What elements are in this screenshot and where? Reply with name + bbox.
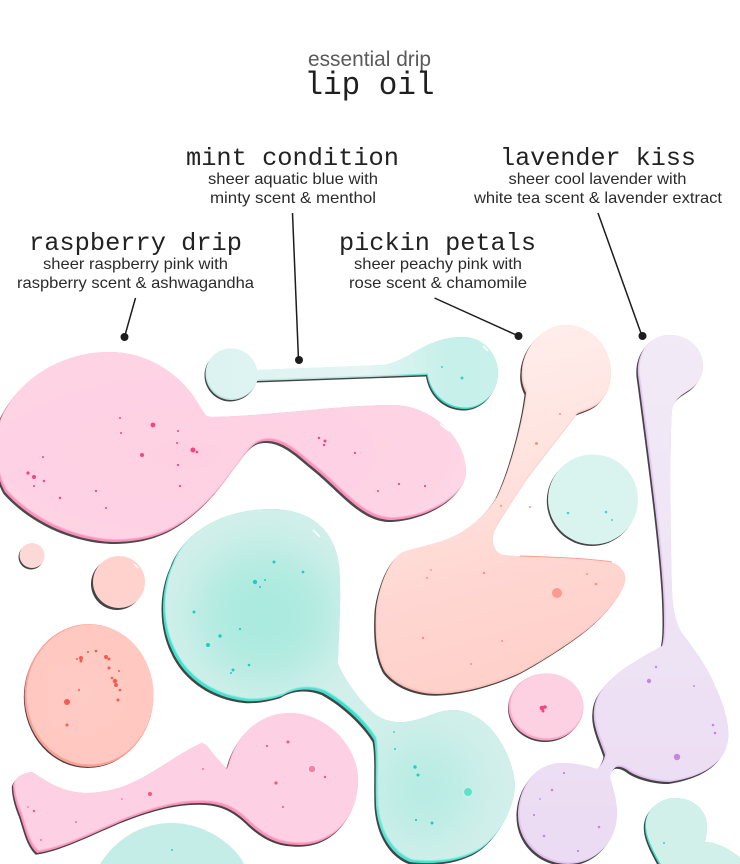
blob: mint barbell [204,336,499,410]
label: pickin petals [339,229,536,292]
blob: bottom pink drop [12,710,360,855]
leader: pickin petals [434,298,522,340]
blob: tiny peach drop [18,543,44,570]
leader: lavender kiss [598,213,646,340]
label: mint condition: sheer aquatic blue with [208,171,378,188]
title: essential drip lip oil: essential drip [308,48,431,71]
blob: bottom mint drop [100,823,244,864]
blob: small pink drop [508,673,584,742]
blob: mint round drop [547,454,638,546]
label: mint condition [186,144,399,207]
label: pickin petals: sheer peachy pink with [354,256,522,273]
label: lavender kiss: white tea scent & lavender extract [473,190,723,207]
label: lavender kiss [473,144,723,207]
label: mint condition: minty scent & menthol [210,190,376,207]
label: pickin petals: rose scent & chamomile [349,275,527,292]
label: pickin petals: pickin petals [339,229,536,258]
blob: large mint drop [162,506,517,864]
blob: peach petal drop [374,324,626,696]
label: raspberry drip [17,229,254,292]
label: raspberry drip: raspberry scent & ashwagandha [17,275,254,292]
title: essential drip lip oil: lip oil [304,67,434,104]
label: lavender kiss: lavender kiss [500,144,696,173]
icon: mint bubble [464,788,472,796]
leader: raspberry drip [120,298,136,341]
icon: peach bubble [552,588,562,598]
title: essential drip lip oil [304,48,434,104]
label: raspberry drip: sheer raspberry pink with [43,256,228,273]
leader: mint condition [292,213,303,364]
blob: small peach drop [91,556,145,610]
icon: pink bubble [308,765,316,773]
label: lavender kiss: sheer cool lavender with [508,171,686,188]
blob: lavender long drop [516,334,730,864]
blob: large raspberry drop [0,350,468,544]
label: mint condition: mint condition [186,144,399,173]
blob: coral drop [24,624,154,768]
blob: bottom-right mint drop [644,796,740,864]
label: raspberry drip: raspberry drip [29,229,242,258]
